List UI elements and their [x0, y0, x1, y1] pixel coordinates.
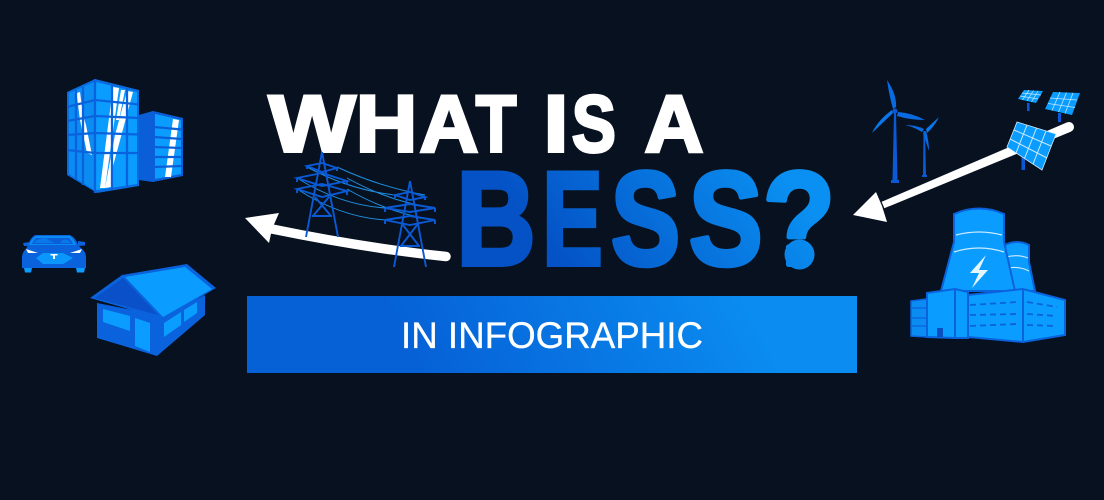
icon: wind turbines — [872, 80, 939, 183]
title: what is a: I — [544, 80, 568, 170]
title: what is a: T — [476, 80, 516, 170]
title: BESS?: ? — [763, 146, 835, 294]
title: BESS?: S — [611, 146, 680, 294]
title: what is a: A — [420, 80, 478, 170]
icon: office buildings — [67, 79, 183, 193]
title: what is a: H — [356, 80, 417, 170]
icon: transmission towers — [297, 152, 435, 267]
arrow: generation to BESS — [853, 122, 1074, 222]
icon: power plant — [911, 208, 1065, 342]
title: what is a: S — [572, 80, 616, 170]
title: what is a: W — [269, 80, 356, 170]
icon: electric car — [22, 235, 86, 272]
title: what is a: A — [644, 80, 704, 170]
icon: house — [90, 264, 216, 356]
title: BESS?: E — [542, 146, 602, 294]
title: BESS?: S — [689, 146, 762, 294]
icon: solar panels — [1007, 90, 1080, 170]
arrow: grid to consumers — [245, 213, 446, 256]
subtitle banner — [247, 296, 857, 373]
title: BESS? — [456, 146, 835, 294]
title: what is a — [269, 80, 704, 170]
title: BESS?: B — [456, 146, 536, 294]
subtitle banner: IN INFOGRAPHIC — [401, 314, 703, 356]
